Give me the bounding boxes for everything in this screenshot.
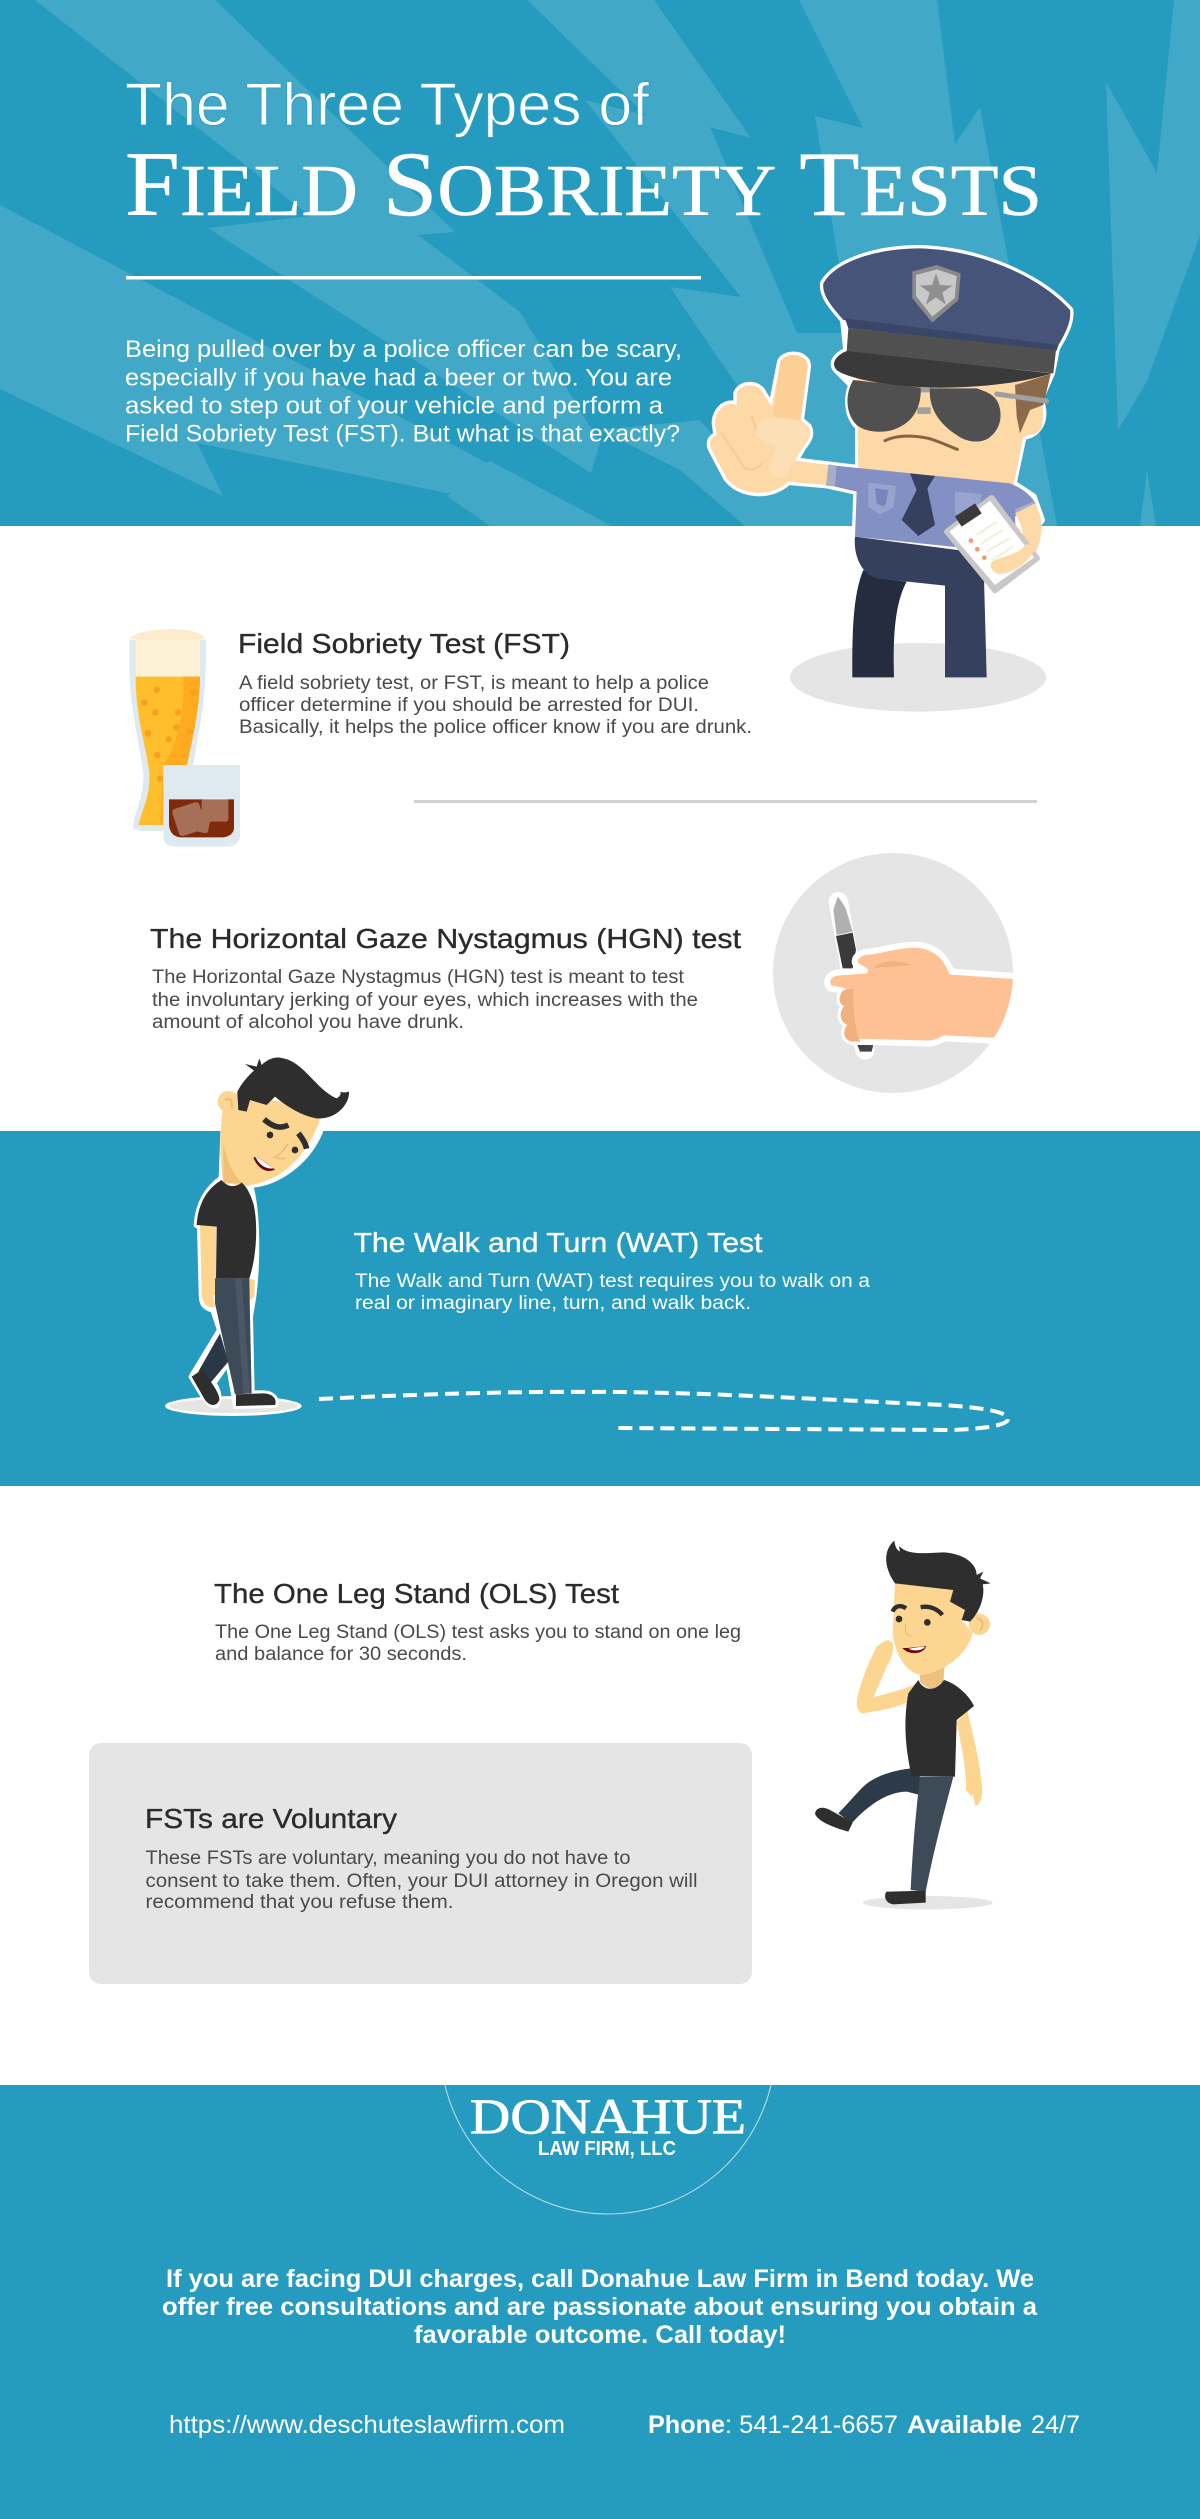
section: horizontal gaze nystagmus: the involuntary jerking of your eyes, which increases with the (152, 990, 698, 1011)
icon: police officer (710, 248, 1070, 712)
panel: walk and turn band (0, 1131, 1200, 1486)
contact phone and availability: Phone (648, 2411, 725, 2439)
section: field sobriety test: A field sobriety test, or FST, is meant to help a police (239, 673, 709, 694)
section: field sobriety test: officer determine if you should be arrested for DUI. (239, 695, 699, 716)
call to action text (162, 2265, 1038, 2349)
panel: FSTs are voluntary callout: These FSTs are voluntary, meaning you do not have to (146, 1848, 630, 1869)
section: horizontal gaze nystagmus (150, 923, 741, 1033)
section: walk and turn test: The Walk and Turn (WAT) Test (354, 1227, 763, 1258)
contact phone and availability: 24/7 (1031, 2411, 1080, 2439)
panel: FSTs are voluntary callout: recommend that you refuse them. (146, 1892, 454, 1913)
section: walk and turn test: The Walk and Turn (WAT) test requires you to walk on a (355, 1271, 870, 1292)
section: one leg stand test: The One Leg Stand (OLS) Test (214, 1578, 619, 1609)
title (125, 71, 1042, 238)
intro text: asked to step out of your vehicle and perform a (125, 392, 664, 420)
section: field sobriety test (238, 628, 752, 738)
section: one leg stand test: and balance for 30 seconds. (215, 1644, 467, 1665)
icon: man standing on one leg (815, 1541, 993, 1909)
section: horizontal gaze nystagmus: The Horizontal Gaze Nystagmus (HGN) test is meant to test (152, 967, 685, 988)
call to action text: offer free consultations and are passionate about ensuring you obtain a (162, 2293, 1038, 2321)
website url: https://www.deschuteslawfirm.com (169, 2411, 565, 2439)
contact phone and availability (648, 2411, 1080, 2439)
title: Field Sobriety Tests (125, 123, 1042, 238)
icon: hand holding pen in circle (773, 853, 1023, 1093)
icon: man walking with head down (165, 1057, 349, 1416)
panel: FSTs are voluntary callout: consent to take them. Often, your DUI attorney in Oregon will (146, 1871, 698, 1892)
title: The Three Types of (125, 71, 649, 138)
section: walk and turn test (354, 1227, 870, 1314)
intro text: Being pulled over by a police officer can be scary, (125, 336, 682, 363)
panel: footer band (0, 2085, 1200, 2519)
section: field sobriety test: Field Sobriety Test (FST) (238, 628, 570, 659)
panel: header background with lightning rays (0, 0, 1200, 526)
call to action text: favorable outcome. Call today! (414, 2321, 786, 2349)
call to action text: If you are facing DUI charges, call Donahue Law Firm in Bend today. We (166, 2265, 1034, 2293)
section: field sobriety test: Basically, it helps the police officer know if you are drunk. (239, 717, 752, 738)
section: horizontal gaze nystagmus: amount of alcohol you have drunk. (152, 1012, 464, 1033)
contact phone and availability: : 541-241-6657 (725, 2411, 898, 2439)
section: one leg stand test: The One Leg Stand (OLS) test asks you to stand on one leg (215, 1622, 741, 1643)
panel: FSTs are voluntary callout (89, 1743, 752, 1984)
section: horizontal gaze nystagmus: The Horizontal Gaze Nystagmus (HGN) test (150, 923, 741, 954)
intro text: especially if you have had a beer or two. You are (125, 364, 672, 392)
icon: beer and whisky glasses (129, 629, 240, 847)
logo: Donahue Law Firm: LAW FIRM, LLC (538, 2138, 676, 2160)
contact phone and availability: Available (907, 2411, 1022, 2439)
section: one leg stand test (214, 1578, 741, 1665)
intro text: Field Sobriety Test (FST). But what is that exactly? (125, 420, 680, 448)
panel: FSTs are voluntary callout: FSTs are Voluntary (145, 1803, 397, 1834)
arrow: dashed walking path (319, 1392, 1008, 1430)
intro text (125, 336, 682, 448)
section: walk and turn test: real or imaginary line, turn, and walk back. (355, 1293, 751, 1314)
logo: Donahue Law Firm (444, 2085, 772, 2214)
logo: Donahue Law Firm: DONAHUE (470, 2088, 746, 2144)
